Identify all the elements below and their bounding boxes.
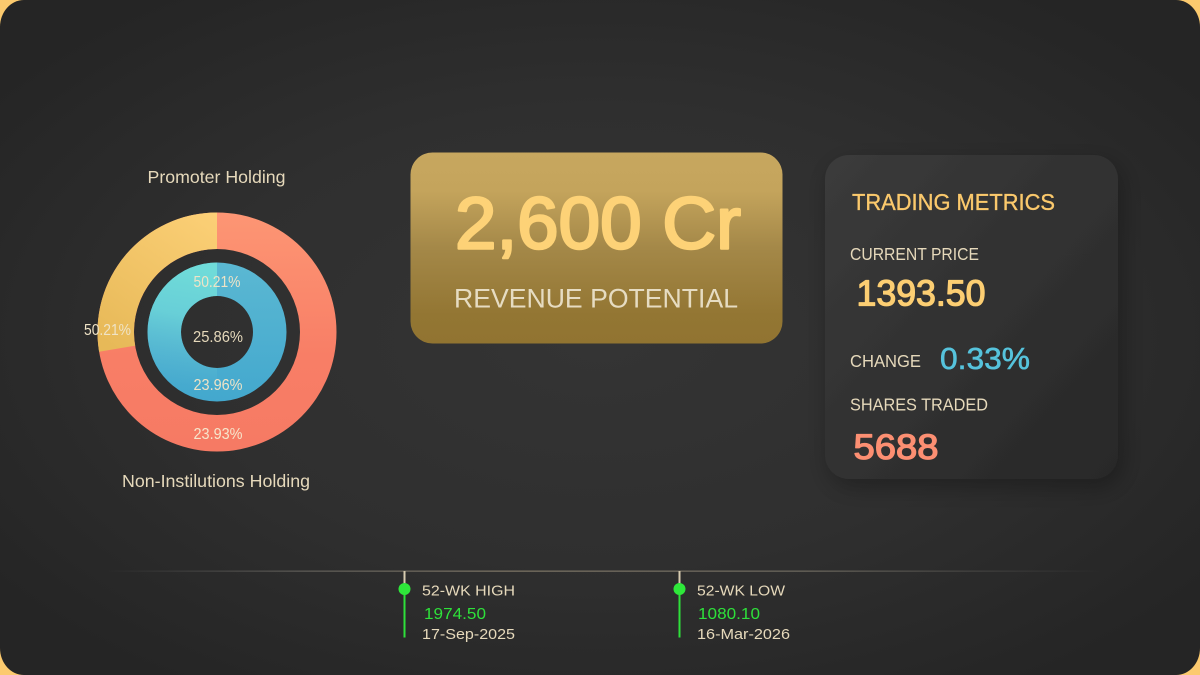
current price value: 1393.50 <box>856 272 986 314</box>
label: outer yellow value: 50.21% <box>84 322 131 339</box>
shares traded label: SHARES TRADED <box>850 394 988 414</box>
marker dot <box>674 583 686 595</box>
current price label: CURRENT PRICE <box>850 244 979 264</box>
label: centre value: 25.86% <box>193 329 243 346</box>
low label: 52-WK LOW <box>697 582 786 600</box>
revenue value: 2,600 Cr <box>455 184 741 264</box>
revenue label: REVENUE POTENTIAL <box>454 284 738 314</box>
inner ring: blue segment <box>148 262 286 402</box>
card background <box>410 152 782 344</box>
timeline marker: 52-week low <box>674 571 790 643</box>
low value: 1080.10 <box>698 606 760 623</box>
timeline marker: 52-week high <box>398 571 515 643</box>
timeline rule <box>105 570 1105 572</box>
outer ring: coral segment <box>97 212 336 452</box>
label: outer coral value: 23.93% <box>194 426 243 443</box>
heading: Non-Institutions Holding: Non-Instilutions Holding <box>122 471 310 491</box>
marker stem <box>678 589 680 638</box>
shares traded value: 5688 <box>854 427 938 467</box>
card background <box>825 155 1118 479</box>
high date: 17-Sep-2025 <box>422 626 515 643</box>
label: inner teal value: 50.21% <box>194 274 241 291</box>
marker dot <box>398 583 410 595</box>
marker stem <box>404 589 406 638</box>
high label: 52-WK HIGH <box>422 582 515 600</box>
marker connector <box>404 571 406 585</box>
high value: 1974.50 <box>424 606 486 623</box>
label: inner blue value: 23.96% <box>194 377 243 394</box>
heading: Promoter Holding: Promoter Holding <box>148 167 286 187</box>
change label: CHANGE <box>850 351 921 371</box>
low date: 16-Mar-2026 <box>697 626 790 643</box>
donut chart: holdings <box>84 167 336 491</box>
change value: 0.33% <box>940 341 1030 376</box>
inner ring: teal segment <box>148 262 217 402</box>
marker connector <box>678 571 680 585</box>
panel: revenue potential <box>410 152 782 344</box>
panel heading: TRADING METRICS <box>852 189 1055 215</box>
outer ring: yellow segment <box>97 212 217 352</box>
panel: trading metrics <box>825 155 1118 479</box>
